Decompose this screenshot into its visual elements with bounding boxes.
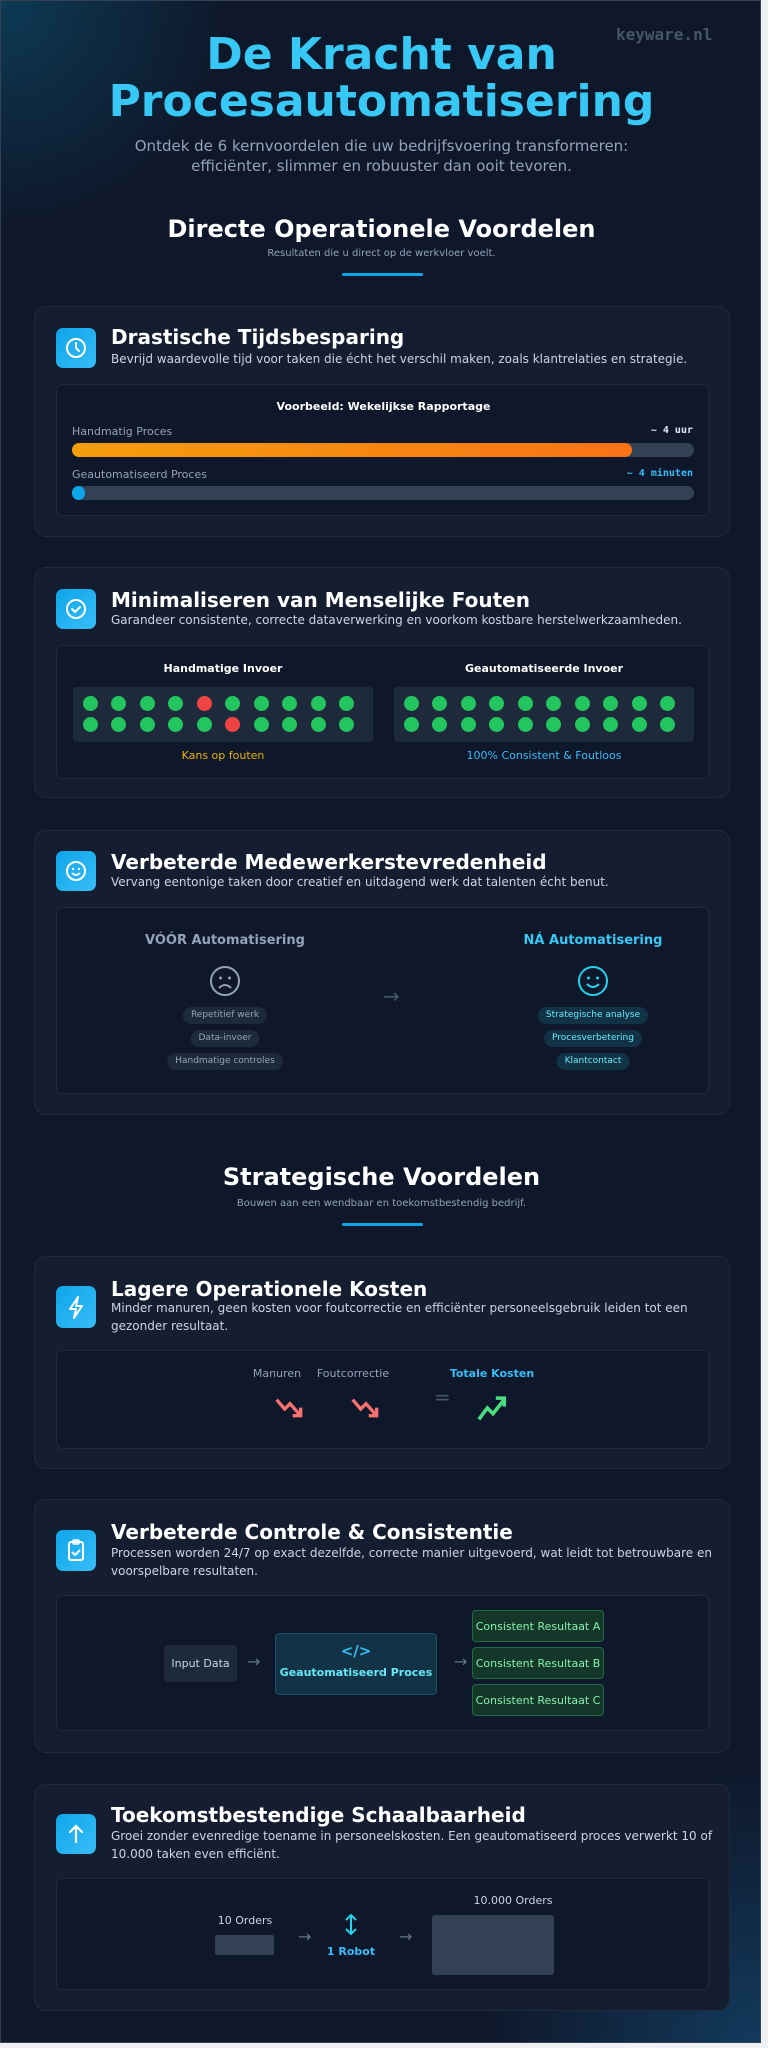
dot comparison chart	[56, 645, 709, 779]
description: Bevrijd waardevolle tijd voor taken die écht het verschil maken, zoals klantrelaties en strategie.	[111, 352, 687, 366]
icon: trend up	[478, 1396, 506, 1420]
icon: lightning	[56, 1286, 96, 1328]
section subtitle: Resultaten die u direct op de werkvloer voelt.	[267, 248, 496, 259]
description: Minder manuren, geen kosten voor foutcorrectie en efficiënter personeelsgebruik leiden tot een gezonder resultaat.	[111, 1301, 688, 1333]
before/after comparison: Klantcontact	[565, 1056, 621, 1066]
process flow diagram: →	[454, 1652, 467, 1671]
bar chart: time comparison: Handmatig Proces	[72, 425, 172, 438]
icon: trend down	[352, 1398, 378, 1418]
process flow diagram: Consistent Resultaat B	[476, 1657, 600, 1670]
before/after comparison: Repetitief werk	[191, 1010, 259, 1020]
panel: lagere kosten	[34, 1256, 730, 1469]
icon: clock	[56, 328, 96, 368]
heading: Verbeterde Controle & Consistentie	[111, 1520, 513, 1544]
bar chart: time comparison: Voorbeeld: Wekelijkse Rapportage	[277, 400, 490, 413]
process flow diagram: Input Data	[171, 1657, 230, 1670]
section subtitle: Bouwen aan een wendbaar en toekomstbestendig bedrijf.	[237, 1198, 526, 1209]
scaling diagram: 1 Robot	[327, 1945, 375, 1958]
bar chart: time comparison: ~ 4 uur	[651, 425, 693, 436]
before/after comparison: Strategische analyse	[546, 1010, 640, 1020]
icon: robot scale arrow	[345, 1914, 357, 1936]
before/after comparison: Procesverbetering	[552, 1033, 634, 1043]
before/after comparison	[56, 907, 709, 1094]
panel: schaalbaarheid	[34, 1784, 730, 2011]
before/after comparison: Data-invoer	[198, 1033, 252, 1043]
brand: keyware.nl: keyware.nl	[616, 25, 712, 44]
cost equation chart: Totale Kosten	[450, 1367, 534, 1380]
before/after comparison: VÓÓR Automatisering	[145, 933, 305, 948]
title: De Kracht van	[206, 29, 557, 80]
cost equation chart: Manuren	[253, 1367, 301, 1380]
panel: controle & consistentie	[34, 1499, 730, 1753]
description: Vervang eentonige taken door creatief en uitdagend werk dat talenten écht benut.	[111, 875, 609, 889]
title: Procesautomatisering	[109, 76, 654, 127]
icon: arrow up	[56, 1814, 96, 1854]
description: Processen worden 24/7 op exact dezelfde, correcte manier uitgevoerd, wat leidt tot betrouwbare en voorspelbare resultaten.	[111, 1546, 712, 1578]
icon: smiley	[56, 851, 96, 891]
panel: tijdsbesparing	[34, 306, 730, 537]
cost equation chart	[56, 1350, 709, 1449]
heading: Verbeterde Medewerkerstevredenheid	[111, 850, 547, 874]
scaling diagram	[56, 1878, 709, 1990]
panel: medewerkerstevredenheid	[34, 830, 730, 1115]
icon: happy face	[578, 966, 608, 996]
scaling diagram: →	[298, 1927, 311, 1946]
dot comparison chart: 100% Consistent & Foutloos	[466, 749, 621, 762]
cost equation chart: Foutcorrectie	[317, 1367, 389, 1380]
dot comparison chart: Geautomatiseerde Invoer	[465, 662, 623, 675]
process flow diagram: Consistent Resultaat A	[476, 1620, 600, 1633]
process flow diagram: Consistent Resultaat C	[476, 1694, 600, 1707]
icon: clipboard	[56, 1530, 96, 1571]
subtitle: Ontdek de 6 kernvoordelen die uw bedrijfsvoering transformeren:	[135, 137, 628, 155]
process flow diagram: Geautomatiseerd Proces	[280, 1666, 432, 1679]
description: Groei zonder evenredige toename in personeelskosten. Een geautomatiseerd proces verwerkt 10 of 10.000 taken even efficiënt.	[111, 1829, 712, 1861]
heading: Drastische Tijdsbesparing	[111, 325, 404, 349]
dot comparison chart: Handmatige Invoer	[164, 662, 282, 675]
section heading: Strategische Voordelen: Strategische Voordelen	[223, 1163, 540, 1191]
icon: trend down	[276, 1398, 302, 1418]
process flow diagram	[56, 1595, 709, 1731]
panel: menselijke fouten	[34, 567, 730, 798]
cost equation chart: =	[434, 1385, 451, 1409]
description: Garandeer consistente, correcte dataverwerking en voorkom kostbare herstelwerkzaamheden.	[111, 613, 682, 627]
process flow diagram: </>	[341, 1642, 371, 1660]
subtitle: efficiënter, slimmer en robuuster dan ooit tevoren.	[191, 157, 572, 175]
title	[109, 29, 654, 127]
bar chart: time comparison	[56, 384, 709, 516]
scaling diagram: 10.000 Orders	[474, 1894, 552, 1907]
scaling diagram: 10 Orders	[218, 1914, 272, 1927]
subtitle	[135, 137, 628, 175]
heading: Toekomstbestendige Schaalbaarheid	[111, 1803, 526, 1827]
before/after comparison: Handmatige controles	[175, 1056, 275, 1066]
section heading: Directe Operationele Voordelen: Directe Operationele Voordelen	[167, 215, 596, 243]
process flow diagram: →	[247, 1652, 260, 1671]
heading: Lagere Operationele Kosten	[111, 1277, 427, 1301]
icon: check	[56, 589, 96, 629]
bar chart: time comparison: Geautomatiseerd Proces	[72, 468, 207, 481]
dot comparison chart: Kans op fouten	[182, 749, 264, 762]
arrow: →	[383, 984, 400, 1008]
before/after comparison: NÁ Automatisering	[524, 933, 662, 948]
bar chart: time comparison: ~ 4 minuten	[627, 468, 693, 479]
heading: Minimaliseren van Menselijke Fouten	[111, 588, 530, 612]
icon: sad face	[210, 966, 240, 996]
scaling diagram: →	[399, 1927, 412, 1946]
